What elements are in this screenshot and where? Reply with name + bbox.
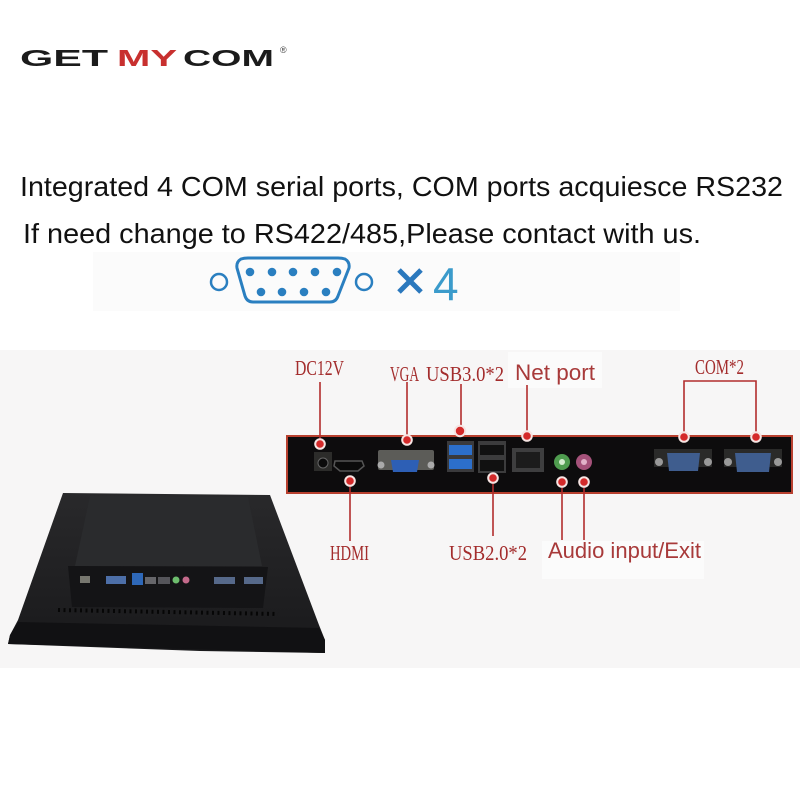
logo: Getmycom	[20, 45, 287, 71]
serial port icon band	[93, 252, 680, 311]
USB 2.0 ports	[478, 441, 506, 473]
logo: Getmycom: ®	[280, 45, 287, 55]
labels: USB3.0*2	[426, 362, 504, 386]
labels	[295, 355, 744, 579]
heading text	[20, 171, 783, 249]
labels: Audio input/Exit	[548, 538, 701, 563]
callout lines	[320, 381, 756, 541]
VGA port	[378, 450, 434, 472]
icon: times four: 4	[433, 258, 459, 310]
icon: times four	[399, 258, 459, 310]
heading text: Integrated 4 COM serial ports, COM ports acquiesce RS232	[20, 171, 783, 202]
icon: DB9 serial connector	[211, 258, 372, 302]
callout dots	[315, 426, 761, 487]
monitor I/O box	[68, 566, 268, 608]
labels: Net port	[515, 360, 595, 385]
monitor vent slots	[58, 610, 278, 614]
Net port	[512, 448, 544, 472]
heading text: If need change to RS422/485,Please contact with us.	[23, 218, 701, 249]
rear I/O panel	[287, 436, 792, 493]
logo: Getmycom: GET	[20, 45, 108, 71]
logo: Getmycom: MY	[117, 45, 177, 71]
COM ports	[654, 449, 782, 472]
labels: DC12V	[295, 356, 344, 380]
labels: COM*2	[695, 355, 744, 379]
logo: Getmycom: COM	[183, 45, 274, 71]
labels: HDMI	[330, 541, 369, 565]
labels: USB2.0*2	[449, 541, 527, 565]
audio jacks	[554, 454, 592, 470]
DC jack	[314, 452, 332, 471]
labels: VGA	[390, 362, 420, 386]
USB 3.0 ports	[447, 441, 474, 472]
Net port label backing	[508, 352, 602, 388]
monitor rear photo	[8, 493, 325, 653]
photo background panel	[0, 350, 800, 668]
HDMI port	[334, 461, 364, 471]
